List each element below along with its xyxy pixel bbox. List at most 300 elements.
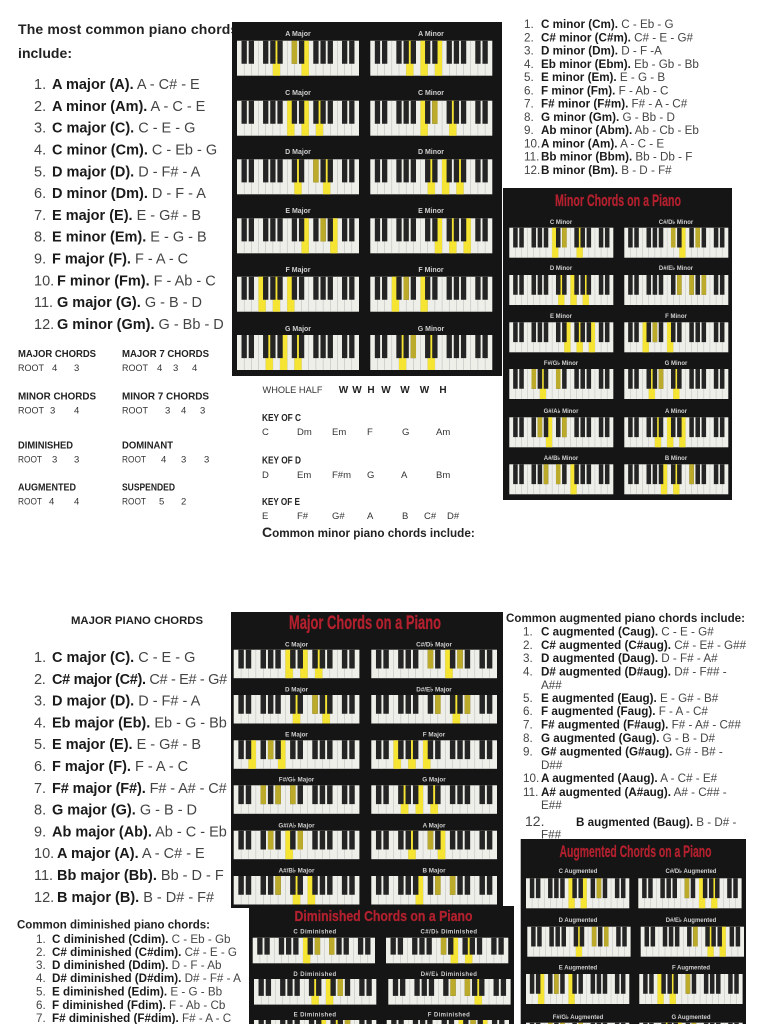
list: common piano chords: A - C# - E — [134, 77, 200, 93]
list: minor chords: G minor (Gm). — [541, 111, 619, 124]
list: common piano chords: F - A - C — [131, 252, 188, 268]
chord: B Major: B Major — [422, 868, 446, 874]
text block: whole half steps and keys: Bm — [436, 470, 450, 481]
list: minor chords: C minor (Cm). — [541, 18, 618, 31]
list: minor chords: 10. — [524, 137, 540, 150]
list: minor chords: 2. — [524, 31, 534, 44]
text block: chord formulas: ROOT — [122, 496, 146, 508]
list: common piano chords: 2. — [34, 99, 46, 115]
list: common piano chords: 7. — [34, 208, 46, 224]
list: major chords: Eb - G - Bb — [150, 715, 227, 731]
list: major chords: Bb major (Bb). — [57, 868, 157, 884]
list: augmented chords: A augmented (Aaug). — [541, 772, 658, 785]
list: diminished chords: D - F - Ab — [168, 959, 221, 972]
chord: E Augmented — [526, 966, 629, 1004]
text block: chord formulas: 4 — [49, 496, 54, 508]
chord: G Minor — [370, 326, 492, 370]
chord: D sharp / E flat Augmented: D#/E♭ Augmented — [666, 917, 717, 924]
list: major chords: E - G# - B — [133, 737, 201, 753]
chord: F Diminished: F Diminished — [428, 1012, 470, 1018]
text block: chord formulas: 4 — [52, 363, 57, 374]
chord: E Diminished: E Diminished — [294, 1012, 336, 1018]
list: minor chords: A - C - E — [618, 137, 664, 150]
list: augmented chords: F augmented (Faug). — [541, 705, 655, 718]
list: major chords: 2. — [34, 672, 45, 688]
text block: whole half steps and keys: W — [381, 385, 391, 396]
list: augmented chords: 10. — [523, 772, 539, 785]
list: augmented chords: D## — [541, 759, 563, 772]
list: minor chords: 8. — [524, 111, 534, 124]
list: diminished chords: D diminished (Ddim). — [52, 959, 168, 972]
list: diminished chords: C diminished (Cdim). — [52, 933, 168, 946]
list: diminished chords: C# diminished (C#dim). — [52, 946, 181, 959]
chord: G sharp / A flat Major: G#/A♭ Major — [278, 822, 315, 830]
list: augmented chords: 4. — [523, 666, 533, 678]
text block: chord formulas: AUGMENTED — [18, 482, 76, 494]
list: augmented chords: D# augmented (D#aug). — [541, 666, 671, 678]
heading: major piano chords: MAJOR PIANO CHORDS — [71, 615, 203, 627]
chord: A Major: A Major — [285, 31, 311, 38]
list: minor chords: D - F -A — [618, 44, 662, 58]
panel: augmented chords on a piano — [521, 839, 746, 1024]
chord: G sharp / A flat Minor: G#/A♭ Minor — [544, 408, 579, 415]
list: diminished chords: 5. — [36, 986, 46, 998]
chord: D Minor — [509, 266, 613, 305]
text block: whole half steps and keys: Am — [436, 427, 450, 438]
list: major chords: 8. — [34, 803, 46, 819]
chord: G Major — [237, 326, 359, 370]
list: minor chords: A minor (Am). — [541, 137, 618, 150]
list: minor chords: Eb minor (Ebm). — [541, 58, 631, 71]
chord: F sharp / G flat Major — [234, 776, 359, 814]
text block: whole half steps and keys: G# — [332, 511, 345, 522]
panel: minor chords on a piano — [503, 188, 732, 500]
list: common piano chords: G major (G). — [57, 295, 141, 311]
list: augmented chords: F# augmented (F#aug). — [541, 718, 668, 732]
chord: F Augmented — [639, 966, 743, 1004]
text block: whole half steps and keys: KEY OF C — [262, 413, 301, 424]
list: major chords: F# - A# - C# — [146, 781, 227, 797]
list: augmented chords: E - G# - B# — [657, 692, 719, 705]
chord: D Major — [237, 149, 359, 194]
list: diminished chords — [36, 933, 241, 1024]
text block: chord formulas: ROOT — [122, 363, 148, 374]
list: augmented chords — [523, 626, 747, 842]
list: major chords — [34, 650, 227, 906]
title: major chords: Major Chords on a Piano — [289, 613, 441, 634]
list: common piano chords: 3. — [34, 121, 46, 137]
list: augmented chords: B - D# - — [693, 816, 737, 829]
text block: whole half steps and keys: G — [402, 427, 409, 438]
list: common piano chords: E minor (Em). — [52, 230, 146, 246]
list: minor chords: B - D - F# — [618, 164, 672, 177]
list: augmented chords: G# - B# - — [672, 746, 723, 758]
list: augmented chords: 12. — [525, 813, 544, 829]
text block: whole half steps and keys: W — [420, 385, 430, 396]
list: augmented chords: F## — [541, 828, 562, 842]
text block: chord formulas: 2 — [181, 496, 186, 508]
list: augmented chords: E## — [541, 799, 562, 812]
list: major chords: 12. — [34, 890, 54, 906]
list: common piano chords: A minor (Am). — [52, 99, 147, 115]
list: diminished chords: 6. — [36, 999, 46, 1012]
list: common piano chords: C major (C). — [52, 121, 134, 137]
list: augmented chords: G# augmented (G#aug). — [541, 746, 672, 758]
heading: most common piano chords: include: — [18, 45, 72, 61]
chord: D Augmented — [527, 918, 631, 957]
list: augmented chords: C - E - G# — [658, 626, 714, 638]
list: common piano chords: C minor (Cm). — [52, 142, 148, 158]
text block: whole half steps and keys: F# — [297, 511, 309, 522]
chord: D Major: D Major — [285, 686, 309, 694]
list: major chords: F - A - C — [131, 759, 188, 775]
chord: C Major — [237, 90, 359, 136]
list: minor chords: F# - A - C# — [628, 98, 688, 111]
text block: chord formulas: 3 — [74, 454, 79, 466]
chord: E Diminished — [254, 1012, 376, 1024]
panel: diminished chords on a piano — [249, 906, 514, 1024]
list: augmented chords: C# augmented (C#aug). — [541, 639, 671, 652]
text block: whole half steps and keys: Em — [297, 470, 311, 481]
text block: whole half steps and keys: KEY OF D — [262, 456, 301, 466]
list: major chords: 9. — [34, 824, 46, 840]
list: minor chords: C# minor (C#m). — [541, 31, 631, 44]
list: major chords: G major (G). — [52, 803, 136, 819]
text block: chord formulas: MINOR CHORDS — [18, 392, 96, 402]
list: common piano chords: F minor (Fm). — [57, 273, 150, 289]
chord: G Augmented — [639, 1015, 743, 1024]
chord: E Major: E Major — [285, 732, 308, 738]
heading: common augmented piano chords: Common augmented piano chords include: — [506, 613, 745, 625]
list: common piano chords: F major (F). — [52, 252, 131, 268]
text block: chord formulas: ROOT — [18, 363, 44, 374]
text block: whole half steps and keys: W — [400, 385, 410, 396]
chord: A Major: A Major — [423, 822, 446, 830]
list: common piano chords: C - E - G — [134, 121, 195, 137]
text block: whole half steps and keys: E — [262, 511, 268, 522]
list: augmented chords: D augmented (Daug). — [541, 652, 658, 665]
chord: F Minor — [370, 267, 492, 312]
text block: chord formulas: DIMINISHED — [18, 440, 73, 452]
list: major chords: C# - E# - G# — [146, 672, 227, 688]
chord: F sharp / G flat Augmented: F#/G♭ Augmented — [553, 1014, 604, 1021]
list: major chords: Ab - C - Eb — [152, 824, 227, 840]
chord: D Augmented: D Augmented — [559, 918, 598, 924]
text block: whole half steps and keys: H — [367, 385, 375, 396]
list: diminished chords: D# diminished (D#dim). — [52, 972, 181, 985]
chord: A Minor — [370, 31, 492, 76]
chord: G sharp / A flat Minor — [509, 408, 613, 447]
panel: major chords on a piano — [231, 612, 503, 908]
chord: C Diminished — [253, 930, 375, 963]
list: augmented chords: C augmented (Caug). — [541, 626, 658, 638]
list: diminished chords: 3. — [36, 959, 46, 972]
list: major chords: E major (E). — [52, 737, 133, 753]
text block: chord formulas: 5 — [159, 496, 164, 508]
list: major chords: D major (D). — [52, 694, 134, 710]
list: minor chords: F# minor (F#m). — [541, 98, 628, 111]
list: common piano chords: C - Eb - G — [148, 142, 217, 158]
list: major chords: 3. — [34, 694, 46, 710]
text block: whole half steps and keys: Em — [332, 427, 346, 438]
chord: D Minor: D Minor — [550, 266, 573, 272]
list: minor chords: 6. — [524, 84, 534, 97]
chord: C sharp / D flat Diminished: C#/D♭ Diminished — [421, 928, 477, 936]
list: augmented chords: 9. — [523, 746, 533, 758]
list: augmented chords: A# - C## - — [671, 786, 727, 799]
text block: whole half steps and keys: F#m — [332, 470, 351, 481]
list: minor chords: C# - E - G# — [631, 31, 694, 44]
list: augmented chords: F# - A# - C## — [668, 718, 741, 732]
text block: chord formulas: 4 — [74, 496, 79, 508]
list: minor chords — [524, 18, 699, 177]
chord: C sharp / D flat Augmented: C#/D♭ Augmented — [666, 868, 717, 875]
text block: whole half steps and keys: A — [367, 511, 374, 522]
list: augmented chords: 7. — [523, 718, 533, 732]
text block: chord formulas: 4 — [161, 454, 166, 466]
text block: chord formulas: 4 — [74, 406, 79, 416]
chord: C sharp / D flat Minor: C#/D♭ Minor — [659, 219, 694, 226]
chord: D sharp / E flat Major: D#/E♭ Major — [416, 686, 452, 694]
list: major chords: B major (B). — [57, 890, 139, 906]
list: minor chords: Ab minor (Abm). — [541, 124, 632, 137]
list: minor chords: 11. — [524, 151, 539, 164]
text block: chord formulas — [18, 349, 209, 508]
chord: A sharp / B flat Major — [234, 868, 359, 904]
list: major chords: 7. — [34, 781, 46, 797]
chord: B Minor: B Minor — [665, 456, 688, 462]
text block: chord formulas: 4 — [181, 406, 186, 416]
list: minor chords: 7. — [524, 98, 534, 111]
chord: C Minor — [370, 90, 492, 136]
text block: chord formulas: 3 — [52, 454, 57, 466]
list: augmented chords: A# augmented (A#aug). — [541, 786, 671, 799]
list: augmented chords: 8. — [523, 732, 533, 745]
text block: chord formulas: 3 — [74, 363, 79, 374]
list: diminished chords: 4. — [36, 972, 46, 985]
chord: G Minor: G Minor — [418, 326, 444, 333]
chord: C Minor: C Minor — [550, 220, 573, 226]
chord: A sharp / B flat Major: A#/B♭ Major — [279, 868, 315, 874]
text block: chord formulas: 3 — [50, 406, 55, 416]
list: minor chords: G - Bb - D — [619, 111, 675, 124]
chord: C sharp / D flat Major — [371, 642, 497, 678]
chord: D sharp / E flat Diminished — [388, 971, 511, 1005]
list: major chords: 4. — [34, 715, 46, 731]
list: major chords: 5. — [34, 737, 46, 753]
list: major chords: Bb - D - F — [157, 868, 224, 884]
list: major chords: 6. — [34, 759, 46, 775]
list: common piano chords: F - Ab - C — [150, 273, 216, 289]
list: common piano chords: D major (D). — [52, 164, 134, 180]
list: minor chords: D minor (Dm). — [541, 44, 618, 58]
text block: chord formulas: 3 — [204, 454, 209, 466]
chord: D Major: D Major — [285, 149, 311, 156]
text block: chord formulas: 3 — [181, 454, 186, 466]
panel: piano chords, A to G — [232, 22, 502, 376]
chord: G Minor: G Minor — [665, 361, 688, 367]
list: augmented chords: 5. — [523, 692, 533, 705]
list: common piano chords: 5. — [34, 164, 46, 180]
list: augmented chords: A - C# - E# — [658, 772, 718, 785]
chord: F Major — [237, 267, 359, 312]
list: common piano chords: E major (E). — [52, 208, 133, 224]
list: diminished chords: D# - F# - A — [181, 972, 241, 985]
list: minor chords: Bb - Db - F — [632, 151, 692, 164]
list: diminished chords: 1. — [36, 933, 46, 946]
chord: G Augmented: G Augmented — [671, 1015, 711, 1021]
text block: chord formulas: 4 — [157, 363, 162, 374]
list: major chords: Eb major (Eb). — [52, 715, 150, 731]
list: augmented chords: 6. — [523, 705, 533, 718]
chord: G Major: G Major — [285, 326, 311, 333]
text block: whole half steps and keys: W — [339, 385, 349, 396]
chord: F Minor: F Minor — [665, 314, 687, 320]
chord: A sharp / B flat Minor — [509, 455, 613, 494]
chord: C Augmented — [526, 869, 629, 908]
text block: chord formulas: 4 — [192, 363, 197, 374]
list: common piano chords: D - F - A — [148, 186, 206, 202]
chord: G Minor — [624, 361, 728, 399]
chord: G Major: G Major — [422, 776, 446, 784]
chord: A Minor: A Minor — [665, 409, 688, 415]
text block: chord formulas: ROOT — [122, 454, 146, 466]
heading: common minor piano chords: Common minor piano chords include: — [262, 524, 475, 540]
text block: chord formulas: DOMINANT — [122, 440, 173, 452]
chord: E Minor — [509, 314, 613, 352]
chord: F Major — [371, 732, 497, 769]
heading: common diminished piano chords: Common diminished piano chords: — [17, 920, 210, 932]
chord: E Augmented: E Augmented — [559, 966, 598, 972]
chord: F Diminished — [387, 1012, 509, 1024]
list: common piano chords: 4. — [34, 142, 46, 158]
text block: whole half steps and keys: KEY OF E — [262, 497, 300, 508]
text block: chord formulas: MAJOR 7 CHORDS — [122, 349, 209, 360]
text block: whole half steps and keys: WHOLE HALF — [262, 385, 323, 396]
chord: C Major: C Major — [285, 642, 309, 648]
list: minor chords: 4. — [524, 58, 534, 71]
chord: D sharp / E flat Minor: D#/E♭ Minor — [659, 265, 694, 272]
text block: whole half steps and keys: D — [262, 470, 269, 481]
list: common piano chords: 9. — [34, 252, 46, 268]
list: common piano chords: 12. — [34, 317, 54, 333]
chord: E Major — [237, 208, 359, 253]
list: minor chords: 12. — [524, 164, 540, 177]
list: major chords: A - C# - E — [139, 846, 205, 862]
list: diminished chords: C# - E - G — [181, 946, 237, 959]
list: major chords: C major (C). — [52, 650, 134, 666]
chord: C sharp / D flat Augmented — [638, 868, 742, 908]
text block: whole half steps and keys: W — [352, 385, 362, 396]
chord: D sharp / E flat Diminished: D#/E♭ Diminished — [421, 971, 477, 978]
chord: F Major: F Major — [423, 732, 446, 738]
list: augmented chords: B augmented (Baug). — [576, 816, 693, 829]
text block: whole half steps and keys: A — [401, 470, 408, 481]
chord: F Augmented: F Augmented — [672, 966, 710, 972]
text block: chord formulas: 3 — [165, 406, 170, 416]
chord: F sharp / G flat Minor — [509, 360, 613, 399]
list: common piano chords: 1. — [34, 77, 46, 93]
chord: E Minor: E Minor — [550, 314, 573, 320]
list: diminished chords: C - Eb - Gb — [168, 933, 231, 946]
list: major chords: F major (F). — [52, 759, 131, 775]
text block: whole half steps and keys: Dm — [297, 427, 312, 438]
text block: chord formulas: MAJOR CHORDS — [18, 349, 96, 360]
title: diminished chords: Diminished Chords on a Piano — [294, 908, 472, 925]
list: diminished chords: F - Ab - Cb — [166, 999, 225, 1012]
list: minor chords: Eb - Gb - Bb — [631, 58, 699, 71]
text block: chord formulas: 3 — [200, 406, 205, 416]
chord: F sharp / G flat Augmented — [526, 1014, 629, 1024]
chord: D sharp / E flat Major — [371, 686, 497, 724]
heading: most common piano chords — [18, 21, 239, 61]
list: common piano chords: E - G - B — [146, 230, 207, 246]
text block: whole half steps and keys: F — [367, 427, 373, 438]
list: minor chords: Bb minor (Bbm). — [541, 151, 632, 164]
chord: B Major — [371, 868, 497, 904]
text block: whole half steps and keys: C — [262, 427, 269, 438]
chord: F Minor — [624, 314, 728, 352]
list: major chords: F# major (F#). — [52, 781, 146, 797]
list: augmented chords: A## — [541, 679, 562, 692]
chord: C Minor — [509, 220, 613, 258]
list: common piano chords: 10. — [34, 273, 54, 289]
list: minor chords: E minor (Em). — [541, 71, 617, 84]
chord: C Augmented: C Augmented — [559, 869, 598, 875]
list: augmented chords: 2. — [523, 639, 533, 652]
list: augmented chords: F - A - C# — [655, 705, 708, 718]
list: common piano chords: E - G# - B — [133, 208, 201, 224]
list: major chords: G - B - D — [136, 803, 197, 819]
chord: E Major — [234, 732, 359, 769]
text block: chord formulas: 3 — [173, 363, 178, 374]
list: common piano chords: A major (A). — [52, 77, 134, 93]
list: major chords: Ab major (Ab). — [52, 824, 152, 840]
chord: A Minor: A Minor — [418, 31, 444, 38]
list: common piano chords: G minor (Gm). — [57, 317, 154, 333]
list: major chords: 10. — [34, 846, 54, 862]
list: diminished chords: 2. — [36, 946, 46, 959]
text block: chord formulas: MINOR 7 CHORDS — [122, 392, 209, 402]
chord: C Diminished: C Diminished — [293, 930, 337, 936]
chord: B Minor — [624, 456, 728, 494]
list: common piano chords: 11. — [34, 295, 53, 311]
list: common piano chords: D - F# - A — [134, 164, 201, 180]
text block: whole half steps and keys: G — [367, 470, 374, 481]
chord: E Minor — [370, 208, 492, 253]
text block: chord formulas: ROOT — [18, 406, 44, 416]
text block: chord formulas: ROOT — [122, 406, 148, 416]
list: diminished chords: E diminished (Edim). — [52, 986, 167, 998]
title: minor chords: Minor Chords on a Piano — [555, 191, 681, 210]
list: common piano chords: 6. — [34, 186, 46, 202]
list: common piano chords — [34, 77, 224, 333]
chord: A Major — [237, 31, 359, 76]
list: major chords: D - F# - A — [134, 694, 201, 710]
list: common piano chords: 8. — [34, 230, 46, 246]
list: major chords: 11. — [34, 868, 53, 884]
chord: C sharp / D flat Major: C#/D♭ Major — [416, 642, 452, 648]
list: augmented chords: 11. — [523, 786, 538, 799]
chord: A Major — [371, 822, 497, 859]
text block: whole half steps and keys: B — [402, 511, 408, 522]
list: minor chords: E - G - B — [617, 71, 665, 84]
chord: D Minor — [370, 149, 492, 194]
list: augmented chords: D - F# - A# — [658, 652, 718, 665]
text block: whole half steps and keys: H — [439, 385, 447, 396]
chord: D Minor: D Minor — [418, 149, 444, 156]
chord: A Minor — [624, 409, 728, 447]
